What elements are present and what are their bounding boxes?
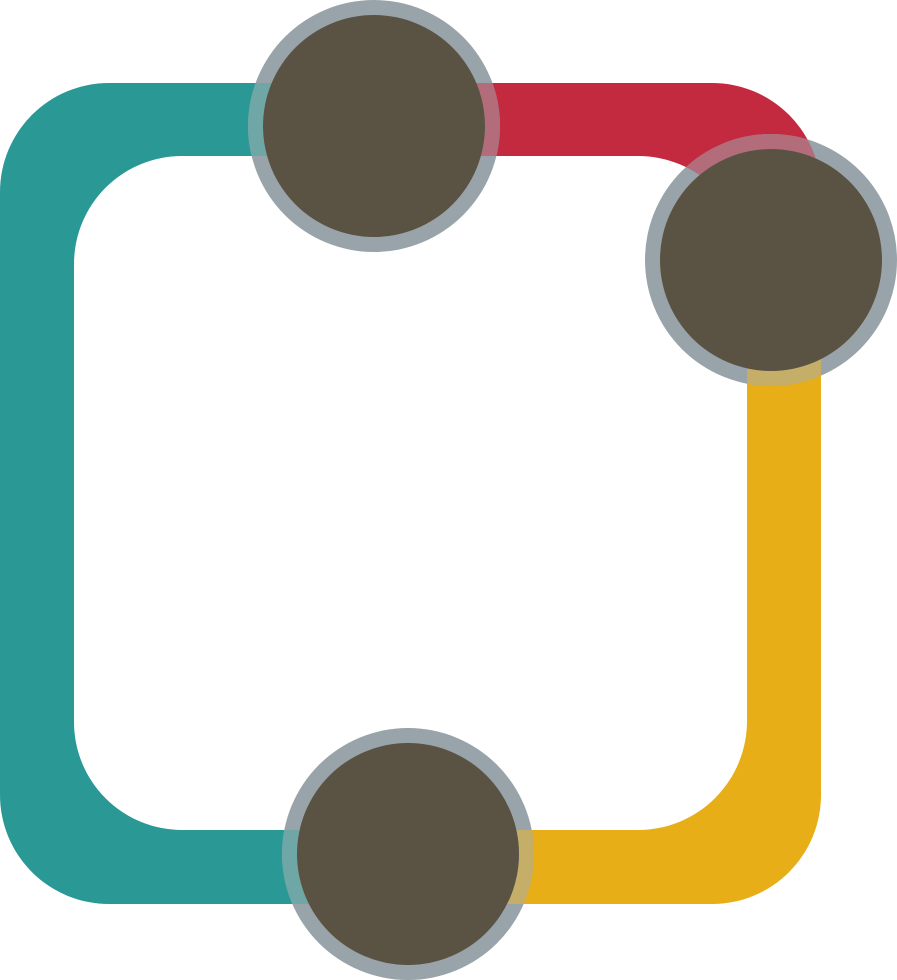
red loop segment xyxy=(450,83,821,265)
node: right circle xyxy=(645,134,897,386)
node: bottom circle xyxy=(270,728,550,980)
teal loop segment xyxy=(0,83,320,904)
yellow loop segment xyxy=(500,340,821,904)
node: top circle xyxy=(240,0,510,252)
